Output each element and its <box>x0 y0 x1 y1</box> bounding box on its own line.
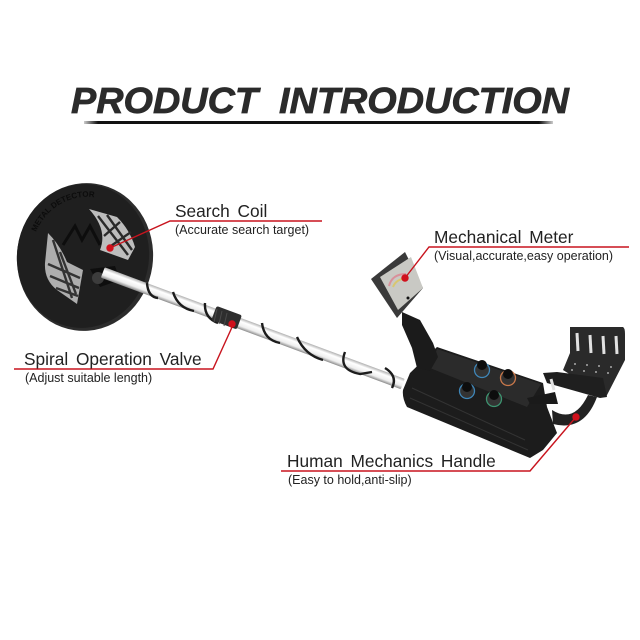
metal detector product photo <box>16 183 625 458</box>
search coil disc: METAL DETECTOR <box>32 191 94 232</box>
search coil disc <box>16 183 154 331</box>
telescopic rod <box>101 267 405 389</box>
lower cuff plate <box>543 372 607 398</box>
callout: mechanical meter: (Visual,accurate,easy operation) <box>434 249 613 263</box>
arm cuff and handle <box>527 327 625 425</box>
callout: search coil: Search Coil <box>175 201 267 221</box>
handle arc <box>552 395 597 425</box>
callout: search coil <box>106 201 322 252</box>
callout: mechanical meter <box>401 227 629 282</box>
upper cuff plate <box>563 327 625 397</box>
title: PRODUCT INTRODUCTION <box>71 80 570 121</box>
callout: search coil: (Accurate search target) <box>175 223 309 237</box>
callout: mechanical meter: Mechanical Meter <box>434 227 574 247</box>
callout: spiral operation valve: (Adjust suitable length) <box>25 371 152 385</box>
spiral operation valve <box>211 306 242 329</box>
callout: human mechanics handle: (Easy to hold,anti-slip) <box>288 473 412 487</box>
callout: human mechanics handle <box>281 413 580 487</box>
meter arm <box>402 312 438 371</box>
mechanical meter <box>371 252 423 318</box>
control box <box>403 347 557 458</box>
spiral cable <box>147 283 394 388</box>
callout: human mechanics handle: Human Mechanics Handle <box>287 451 496 471</box>
callout: spiral operation valve <box>14 320 236 385</box>
knobs <box>460 360 516 406</box>
callout: spiral operation valve: Spiral Operation Valve <box>24 349 202 369</box>
